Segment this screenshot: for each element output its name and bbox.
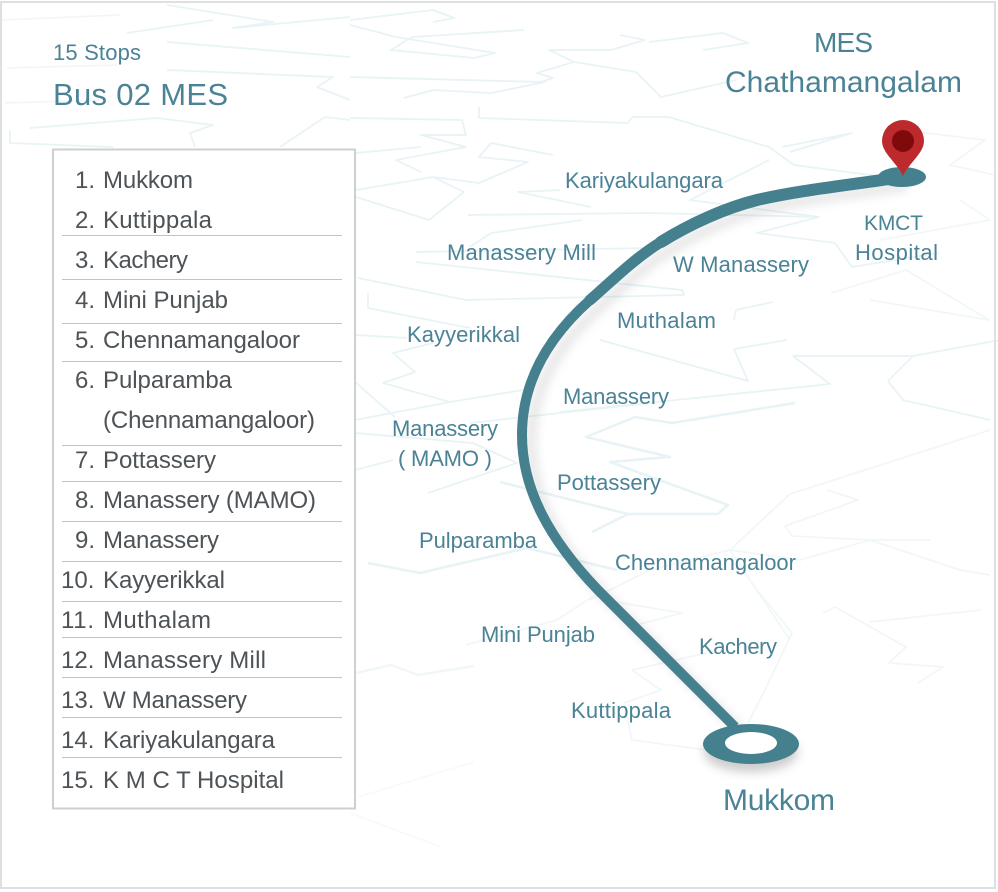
panel: stop list: 15. [61,767,94,794]
destination label: MES [814,27,873,58]
panel: stop list: 6. [75,367,95,394]
start marker: Mukkom [703,724,799,772]
stop labels: ( MAMO ) [398,446,492,471]
stop labels: Kariyakulangara [565,168,724,193]
stop labels: Muthalam [617,308,716,333]
panel: stop list: (Chennamangaloor) [103,407,315,434]
panel: stop list: W Manassery [103,687,247,714]
stop labels: Pottassery [557,470,661,495]
panel: stop list: 5. [75,327,95,354]
panel: stop list: 8. [75,487,95,514]
panel: stop list: Mukkom [103,167,193,194]
stop labels: Manassery [563,384,669,409]
panel: stop list: Kariyakulangara [103,727,276,754]
destination label: Chathamangalam [725,66,962,99]
panel: stop list: 13. [61,687,94,714]
stop labels: Manassery [392,416,498,441]
end marker: map pin [878,120,926,187]
stop labels: Hospital [855,240,938,265]
panel: stop list: Pulparamba [103,367,233,394]
panel: stop list: K M C T Hospital [103,767,284,794]
stop labels: KMCT [864,212,923,235]
panel: stop list: Kachery [103,247,188,274]
stop labels: Kachery [699,634,777,659]
stop labels: W Manassery [673,252,809,277]
panel: stop list: 4. [75,287,95,314]
route line [522,178,904,735]
stop labels: Kuttippala [571,698,672,723]
panel: stop list: 11. [61,607,94,634]
panel: stop list: 1. [75,167,95,194]
heading: stop count: 15 Stops [53,40,141,65]
panel: stop list: Manassery Mill [103,647,266,674]
panel: stop list: 9. [75,527,95,554]
panel: stop list: Kayyerikkal [103,567,225,594]
heading: bus name: Bus 02 MES [53,77,228,112]
panel: stop list: Muthalam [103,607,211,634]
panel: stop list: Manassery (MAMO) [103,487,316,514]
panel: stop list: Manassery [103,527,219,554]
panel: stop list: Mini Punjab [103,287,228,314]
panel: stop list: 14. [61,727,94,754]
panel: stop list: Kuttippala [103,207,213,234]
stop labels [392,168,938,723]
panel: stop list: 3. [75,247,95,274]
stop labels: Chennamangaloor [615,550,796,575]
panel: stop list: 12. [61,647,94,674]
stop labels: Kayyerikkal [407,322,520,347]
panel: stop list: 7. [75,447,95,474]
panel: stop list: Pottassery [103,447,216,474]
destination label [725,27,962,99]
panel: stop list [53,150,355,808]
stop labels: Mini Punjab [481,622,595,647]
stop labels: Manassery Mill [447,240,596,265]
panel: stop list: 10. [61,567,94,594]
origin label: Mukkom [723,784,835,817]
panel: stop list: Chennamangaloor [103,327,300,354]
stop labels: Pulparamba [419,528,538,553]
panel: stop list: 2. [75,207,95,234]
